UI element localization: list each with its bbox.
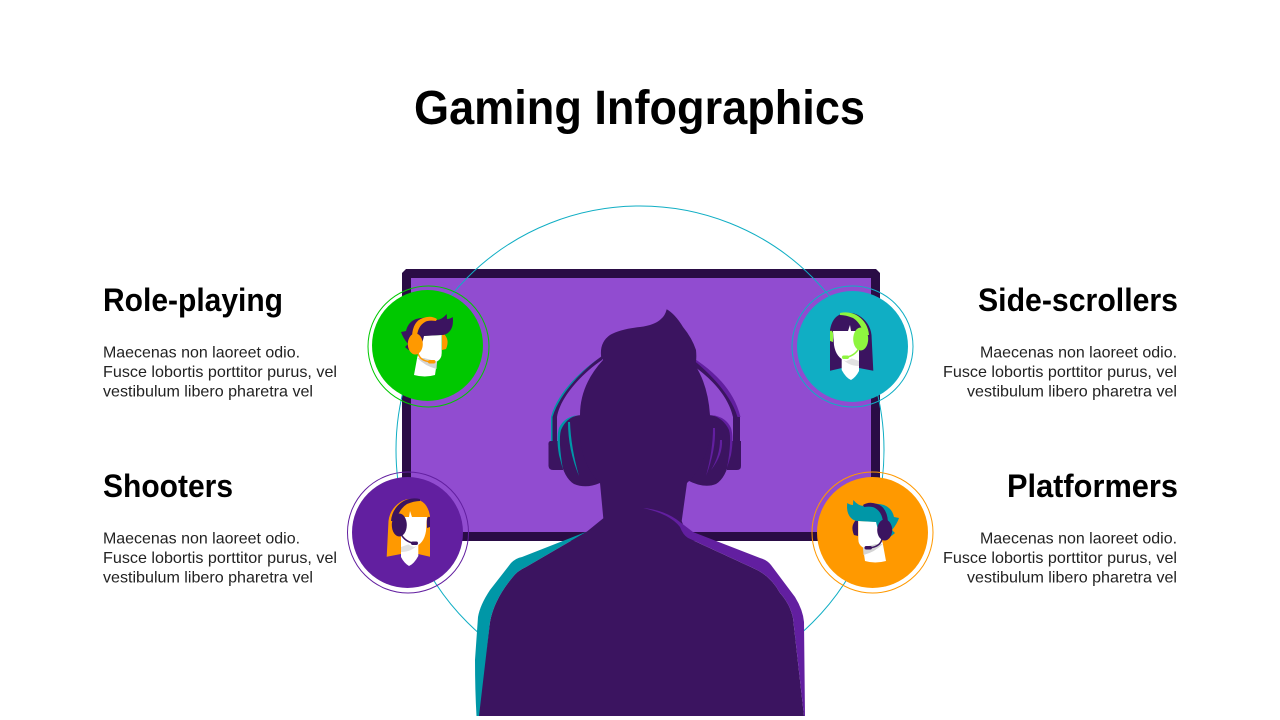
text block: shooters: Maecenas non laoreet odio.	[103, 530, 300, 548]
text block: side-scrollers: Fusce lobortis porttitor purus, vel	[943, 364, 1177, 381]
text block: platformers: vestibulum libero pharetra vel	[967, 570, 1177, 586]
headband right purple edge	[683, 352, 740, 417]
text block: role-playing: Fusce lobortis porttitor purus, vel	[103, 364, 337, 381]
text block: shooters	[103, 468, 337, 586]
body	[479, 483, 804, 716]
badge: platformers	[812, 472, 933, 593]
text block: platformers: Maecenas non laoreet odio.	[980, 530, 1177, 548]
text block: shooters: vestibulum libero pharetra vel	[103, 570, 313, 586]
text block: side-scrollers: vestibulum libero pharetra vel	[967, 384, 1177, 400]
gamer silhouette	[475, 309, 805, 716]
badge: side-scrollers	[792, 286, 913, 407]
text block: role-playing: Role-playing	[103, 282, 283, 318]
text block: platformers	[943, 468, 1178, 586]
text block: platformers: Platformers	[1007, 468, 1178, 504]
badge: role-playing	[368, 286, 489, 407]
body right purple highlight	[643, 508, 805, 716]
text block: platformers: Fusce lobortis porttitor purus, vel	[943, 550, 1177, 567]
text block: side-scrollers	[943, 282, 1178, 400]
icon: female gamer with green headset	[830, 312, 873, 380]
title: Gaming Infographics	[414, 82, 865, 135]
large teal ring	[396, 206, 884, 694]
text block: shooters: Shooters	[103, 468, 233, 504]
headband left	[548, 356, 602, 470]
monitor screen	[402, 269, 880, 541]
head and hair	[580, 309, 710, 483]
ear cup right	[687, 415, 732, 486]
icon: male gamer with dark headset	[847, 500, 899, 562]
body left teal highlight	[475, 532, 587, 716]
headband right	[683, 353, 741, 470]
ear cup left teal accents	[558, 415, 579, 476]
badge: shooters	[348, 472, 468, 593]
text block: side-scrollers: Side-scrollers	[978, 282, 1178, 318]
text block: role-playing: Maecenas non laoreet odio.	[103, 344, 300, 362]
ear cup right purple accents	[706, 415, 732, 476]
text block: role-playing: vestibulum libero pharetra vel	[103, 384, 313, 400]
ear cup left	[558, 415, 600, 486]
text block: shooters: Fusce lobortis porttitor purus, vel	[103, 550, 337, 567]
icon: male gamer with orange headset	[401, 314, 453, 376]
text block: side-scrollers: Maecenas non laoreet odio.	[980, 344, 1177, 362]
text block: role-playing	[103, 282, 337, 400]
icon: female gamer with dark headset	[387, 498, 430, 566]
headband left teal edge	[551, 356, 602, 441]
